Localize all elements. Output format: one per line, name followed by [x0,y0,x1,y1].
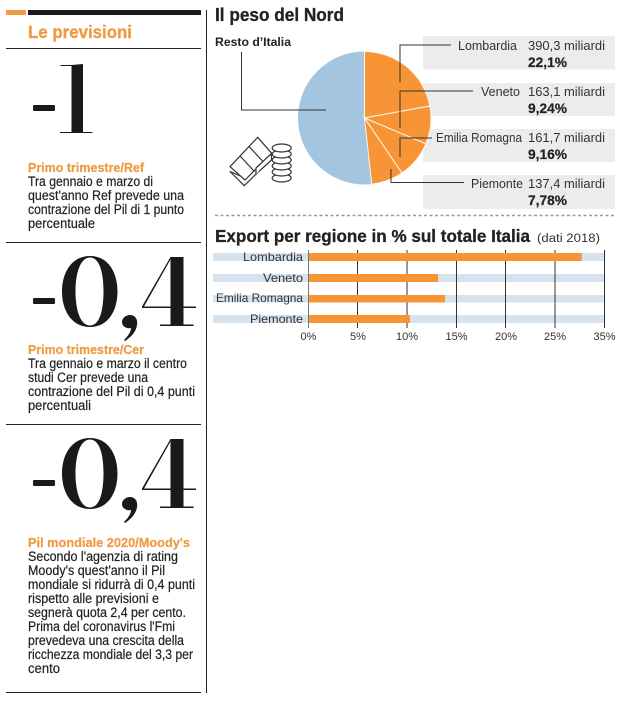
axis labels: 0% [301,331,317,343]
axis labels: 10% [396,331,418,343]
axis labels: 15% [445,331,468,343]
row: Emilia Romagna: 9,16% [528,147,567,162]
row: Veneto: 163,1 miliardi [528,85,605,99]
description: rispetto alle previsioni e [28,591,159,606]
label: Resto d'Italia: Resto d’Italia [215,37,292,49]
description: contrazione del Pil di 0,4 punti [28,384,195,399]
axis labels: 20% [495,331,517,343]
pie chart [298,52,431,184]
description: quest'anno Ref prevede una [28,188,184,203]
description: Secondo l'agenzia di rating [28,549,178,564]
row: Emilia Romagna [436,131,605,162]
background bands [213,253,605,323]
row: Piemonte: Piemonte [471,177,523,191]
description: Tra gennaio e marzo di [28,174,153,189]
region labels [216,250,303,326]
row: Emilia Romagna: 161,7 miliardi [528,131,605,145]
forecast: Cer [28,256,196,413]
forecast: Moody's [28,438,196,676]
big number -0,4 [33,256,196,341]
label: Pil mondiale 2020/Moody's: Pil mondiale 2020/Moody's [28,535,190,550]
description: contrazione del Pil di 1 punto [28,202,184,217]
row: Piemonte: 137,4 miliardi [528,177,605,191]
row: Lombardia: 390,3 miliardi [528,39,605,53]
row: Veneto [481,85,605,116]
description [28,356,195,413]
description: percentuali [28,398,91,413]
region labels: Veneto [263,271,303,285]
orange bars [309,253,582,323]
row: Lombardia: Lombardia [458,39,517,53]
forecast: Ref [28,64,184,231]
heading: Il peso del Nord: Il peso del Nord [215,5,344,25]
row: Veneto: Veneto [481,85,520,99]
description [28,174,184,231]
description: studi Cer prevede una [28,370,148,385]
heading: Export per regione: (dati 2018) [537,233,600,245]
axis labels: 25% [544,331,566,343]
leader lines [242,45,473,182]
big number -1 [33,64,92,133]
row: Emilia Romagna: Emilia Romagna [436,131,522,145]
left column: Le previsioni [6,10,201,693]
icon: banknotes and coins [230,137,291,186]
row: Piemonte: 7,78% [528,193,567,208]
row: Lombardia: 22,1% [528,55,567,70]
description: Moody's quest'anno il Pil [28,563,165,578]
region labels: Emilia Romagna [216,291,303,305]
value panels [423,36,615,209]
label: Primo trimestre/Cer: Primo trimestre/Cer [28,342,144,357]
description: prevedeva una crescita della [28,633,184,648]
row: Lombardia [458,39,605,70]
description: Prima del coronavirus l'Fmi [28,619,175,634]
axis labels: 5% [350,331,366,343]
region labels: Lombardia [243,250,303,264]
description: Tra gennaio e marzo il centro [28,356,187,371]
axis labels [301,331,616,343]
row: Veneto: 9,24% [528,101,567,116]
description: mondiale si ridurrà di 0,4 punti [28,577,195,592]
row: Piemonte [471,177,605,208]
heading: Export per regione: Export per regione in % sul totale Italia [215,226,530,246]
header bars [6,10,201,15]
description: segnerà quota 2,4 per cento. [28,605,186,620]
description [28,549,195,676]
label: Primo trimestre/Ref: Primo trimestre/Ref [28,160,145,175]
region labels: Piemonte [250,312,303,326]
bar chart: export by region [213,250,616,343]
description: percentuale [28,216,95,231]
heading: Le previsioni: Le previsioni [28,22,132,42]
big number -0,4 [33,438,196,523]
description: ricchezza mondiale del 3,3 per [28,647,193,662]
description: cento [28,661,60,676]
axis labels: 35% [593,331,616,343]
